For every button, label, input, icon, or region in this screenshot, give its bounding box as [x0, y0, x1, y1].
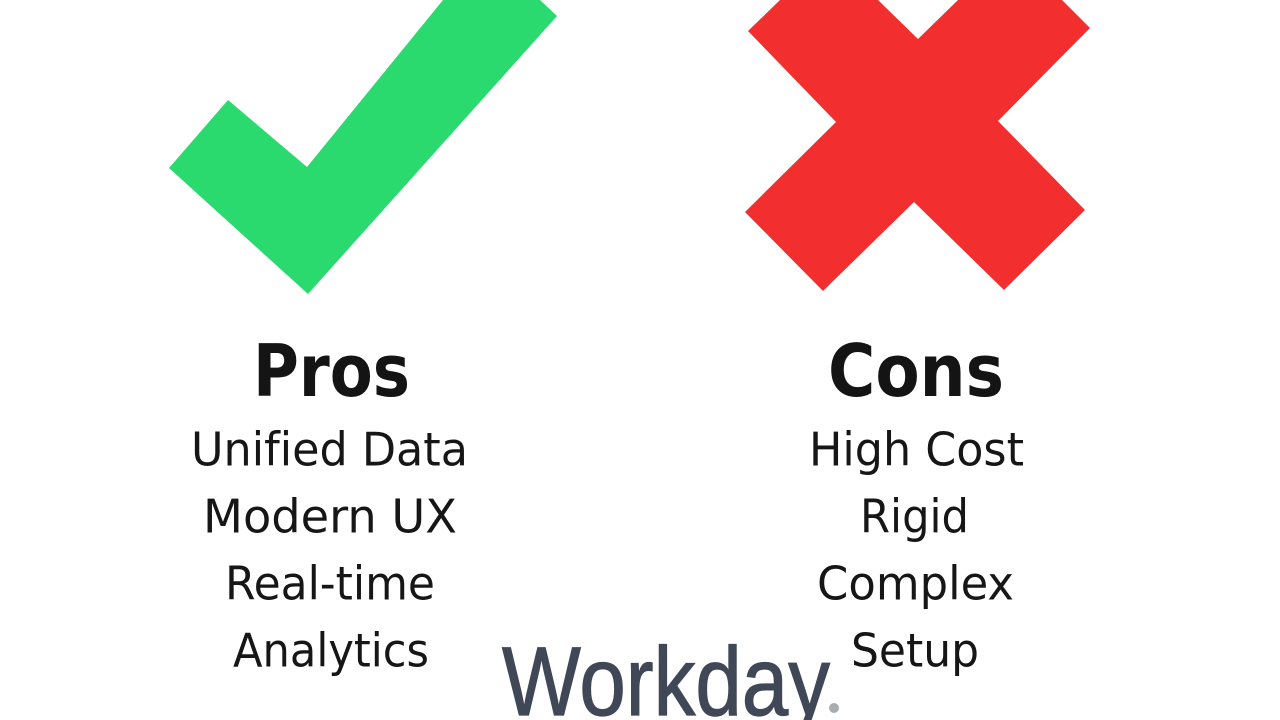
- list: cons items: [809, 422, 1024, 678]
- panel: cons: [745, 0, 1090, 678]
- list: cons items: Rigid: [860, 490, 969, 544]
- list: pros items: Analytics: [233, 624, 429, 678]
- panel: pros: [169, 0, 557, 678]
- list: pros items: [191, 422, 468, 678]
- list: pros items: Unified Data: [191, 422, 468, 476]
- icon: green check mark: [169, 0, 557, 294]
- icon: red cross: [745, 0, 1090, 291]
- list: cons items: Setup: [851, 624, 979, 678]
- heading: Pros: Pros: [253, 329, 410, 413]
- list: pros items: Real-time: [225, 556, 435, 610]
- heading: Cons: Cons: [828, 329, 1004, 413]
- list: pros items: Modern UX: [203, 490, 457, 544]
- list: cons items: High Cost: [809, 422, 1024, 476]
- list: cons items: Complex: [817, 556, 1014, 610]
